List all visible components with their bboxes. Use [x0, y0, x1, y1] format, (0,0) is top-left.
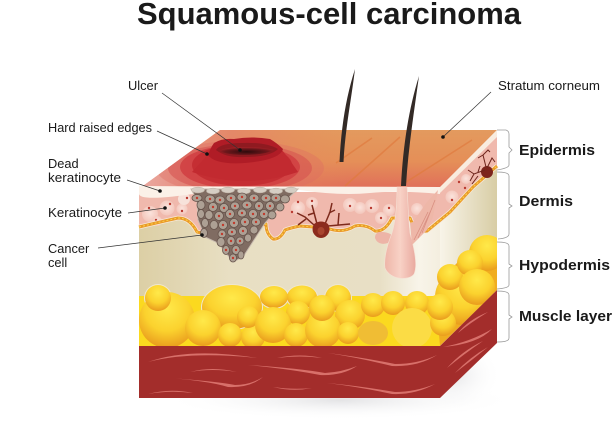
hair short — [340, 69, 355, 162]
left and top labels: cell — [48, 255, 67, 270]
epidermis pink layer — [139, 136, 497, 238]
melanocyte side — [468, 150, 495, 184]
layer labels: Hypodermis — [519, 257, 610, 274]
dermis side — [440, 131, 497, 346]
left and top labels: Stratum corneum — [498, 78, 600, 93]
left and top labels: Ulcer — [128, 78, 159, 93]
layer labels: Epidermis — [519, 142, 595, 159]
left and top labels: Hard raised edges — [48, 120, 152, 135]
panel: skin block — [139, 69, 505, 398]
melanocyte front — [297, 203, 350, 238]
left and top labels: keratinocyte — [48, 170, 121, 185]
ulcer — [159, 138, 324, 186]
hypodermis fat — [139, 235, 505, 349]
left and top labels: Keratinocyte — [48, 205, 122, 220]
epidermis side edge — [440, 131, 497, 193]
basal layer wave — [139, 166, 497, 239]
ground shadow — [160, 339, 520, 420]
label dots — [158, 135, 445, 237]
left and top labels — [48, 78, 600, 270]
cancer mass — [191, 187, 298, 262]
label lines — [98, 92, 491, 248]
left and top labels: Dead — [48, 156, 79, 171]
keratinocytes — [142, 174, 471, 226]
layer labels — [519, 142, 612, 325]
dermis front — [139, 200, 440, 300]
muscle layer — [139, 290, 497, 398]
hair follicle — [375, 187, 438, 278]
top skin surface — [143, 130, 497, 187]
hair long — [401, 76, 419, 186]
layer labels: Muscle layer — [519, 308, 612, 325]
layer labels: Dermis — [519, 193, 573, 210]
white stratum strip — [139, 186, 440, 198]
left and top labels: Cancer — [48, 241, 90, 256]
brackets — [497, 130, 512, 342]
